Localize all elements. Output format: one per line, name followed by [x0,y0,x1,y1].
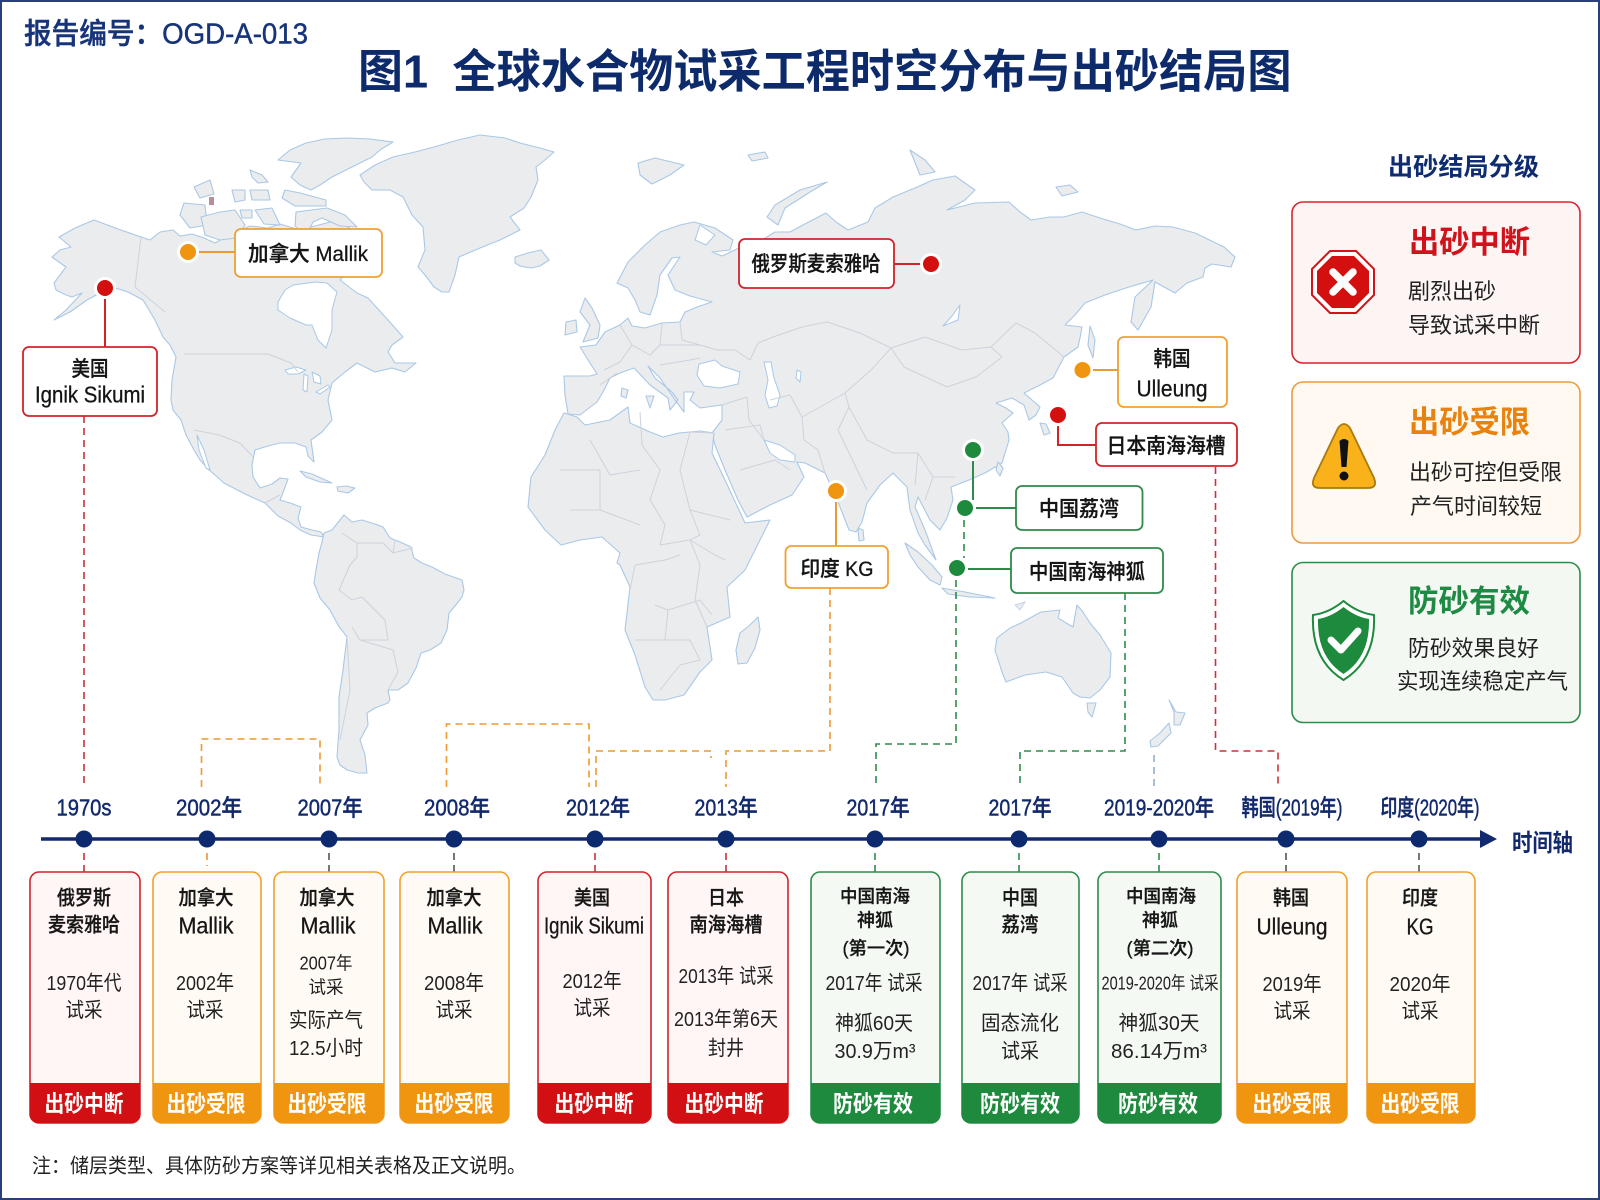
footnote: 注：储层类型、具体防砂方案等详见相关表格及正文说明。 [32,1154,526,1178]
title: 全球水合物试采工程时空分布与出砂结局图 [452,46,1292,98]
legend item: sand control effective: 实现连续稳定产气 [1397,669,1568,694]
map marker: Japan Nankai: 日本南海海槽 [1106,435,1226,458]
card: Russia Messoyakha: 俄罗斯 [57,886,111,910]
card: USA Ignik Sikumi [538,872,651,1123]
year labels: 2013年 [694,794,758,820]
card: China Shenhu first: 2017年 试采 [826,972,922,995]
card: Canada Mallik 2008: 出砂受限 [414,1090,494,1116]
card: Canada Mallik 2007: 2007年 [300,954,352,974]
card: China Shenhu second: 86.14万m³ [1111,1040,1207,1063]
map marker: India KG: 印度 KG [800,558,874,581]
caribbean islands [300,471,355,493]
card: Japan Nankai: 2013年 试采 [678,965,774,988]
map marker: USA Ignik Sikumi [23,277,157,416]
connector: Liwan dot dashed [963,520,965,558]
card: Canada Mallik 2008 [400,872,509,1123]
card: China Shenhu first: 神狐60天 [835,1012,913,1035]
hudson bay and great lakes [278,282,337,348]
north america [52,220,416,537]
card: Japan Nankai [668,872,788,1123]
card: China Liwan: 固态流化 [981,1012,1059,1035]
card: Canada Mallik 2002: Mallik [178,912,234,938]
inland seas [695,225,960,462]
card: India KG: KG [1406,914,1434,940]
card: Korea Ulleung: Ulleung [1256,914,1328,940]
map marker: India KG [786,480,888,588]
card: Korea Ulleung: 出砂受限 [1252,1090,1332,1116]
year labels: 1970s [56,794,112,820]
card: USA Ignik Sikumi: Ignik Sikumi [544,912,644,938]
map marker: China Shenhu: 中国南海神狐 [1029,561,1145,584]
card: China Shenhu first: 30.9万m³ [834,1040,916,1063]
card: China Liwan: 中国 [1002,886,1038,910]
islands of europe and arctic russia [565,150,1095,541]
world map [52,135,1235,773]
legend item: sand limited [1292,382,1580,543]
card: China Liwan [962,872,1079,1123]
card: China Shenhu first: 防砂有效 [833,1090,913,1116]
connector: Ignik Sikumi dashed to 1970s [83,416,85,787]
card: Canada Mallik 2002: 试采 [186,999,224,1022]
connector: 2002 to 2007 dashed [202,739,320,787]
map marker: Korea Ulleung [1072,337,1227,407]
icon: warning triangle [1313,424,1375,488]
card: Japan Nankai: 南海海槽 [690,914,762,936]
card: China Shenhu first [811,872,940,1123]
card: China Shenhu second: (第二次) [1126,938,1194,958]
icon: stop octagon with cross [1312,251,1374,313]
card: USA Ignik Sikumi: 美国 [574,886,610,910]
year labels: 2017年 [988,794,1052,820]
card: India KG [1367,872,1475,1123]
card: India KG: 出砂受限 [1380,1090,1460,1116]
icon: shield with check [1313,601,1374,680]
legend item: sand interruption: 剧烈出砂 [1408,279,1496,304]
card: Canada Mallik 2007: Mallik [300,912,356,938]
madagascar [736,617,760,664]
card: USA Ignik Sikumi: 出砂中断 [554,1090,634,1116]
eurasia [564,176,1235,560]
card: Russia Messoyakha: 麦索雅哈 [48,914,120,936]
card: China Shenhu second [1098,872,1221,1123]
card: Russia Messoyakha [30,872,140,1123]
connector: India KG to 2013 dashed [726,588,830,787]
africa [528,407,770,700]
report number: 报告编号：OGD-A-013 [24,18,308,50]
card: Canada Mallik 2002: 加拿大 [178,886,234,910]
card: Canada Mallik 2002: 2002年 [176,972,234,995]
year labels: 2019-2020年 [1104,794,1214,820]
card: Japan Nankai: 2013年第6天 [674,1008,778,1031]
card: Russia Messoyakha: 出砂中断 [44,1090,124,1116]
card: China Shenhu second: 中国南海 [1126,886,1196,906]
card: Korea Ulleung: 韩国 [1273,886,1309,910]
connector: 2012 to 2013 dashed [596,751,711,787]
connector: Shenhu label to 2017 dashed [1020,593,1125,787]
year labels: 2012年 [566,794,630,820]
card: China Shenhu second: 2019-2020年 试采 [1102,974,1218,994]
year labels: 韩国(2019年) [1242,794,1342,820]
year labels: 2007年 [298,794,362,820]
card: China Shenhu second: 神狐 [1142,910,1178,930]
card: Canada Mallik 2008: 2008年 [424,972,484,995]
baja california [197,435,210,470]
card: Korea Ulleung: 试采 [1274,1000,1310,1023]
year labels: 2002年 [176,794,242,820]
card: USA Ignik Sikumi: 2012年 [562,970,622,993]
card: China Liwan: 2017年 试采 [972,972,1068,995]
axis label: 时间轴 [1512,830,1573,857]
legend item: sand control effective: 防砂有效 [1408,584,1530,619]
card: China Shenhu second: 神狐30天 [1118,1012,1200,1035]
legend heading: 出砂结局分级 [1388,154,1539,182]
timeline axis [41,830,1497,848]
card: Canada Mallik 2002: 出砂受限 [166,1090,246,1116]
map marker: Russia Messoyakha: 俄罗斯麦索雅哈 [752,253,880,276]
card: Canada Mallik 2007: 加拿大 [300,886,354,910]
legend item: sand control effective [1292,562,1580,722]
map marker: Russia Messoyakha [739,239,942,288]
connector: 2008 to 2012 dashed [446,724,589,787]
title: 图1 [358,46,428,98]
card: China Shenhu first: 神狐 [857,910,893,930]
card: China Shenhu first: 中国南海 [840,886,910,906]
timeline stems [84,853,1419,872]
map marker: USA Ignik Sikumi: 美国 [72,358,108,381]
card: Canada Mallik 2007: 12.5小时 [289,1037,363,1060]
card: Korea Ulleung: 2019年 [1262,973,1322,996]
new zealand [1150,700,1185,747]
card: China Shenhu second: 防砂有效 [1118,1090,1198,1116]
card: China Liwan: 荔湾 [1002,912,1038,936]
card: China Liwan: 试采 [1001,1040,1039,1063]
card: India KG: 试采 [1402,1000,1438,1023]
arctic islands [180,138,393,240]
card: Japan Nankai: 封井 [708,1037,744,1060]
card: Canada Mallik 2007: 出砂受限 [288,1090,366,1116]
card: India KG: 2020年 [1390,973,1450,996]
card: Canada Mallik 2007: 试采 [308,978,344,998]
panel: legend [1292,154,1580,722]
card: China Shenhu first: (第一次) [842,938,910,958]
card: Canada Mallik 2008: 试采 [436,999,472,1022]
south america [314,515,464,773]
legend item: sand limited: 产气时间较短 [1410,494,1542,519]
card: China Liwan: 防砂有效 [980,1090,1060,1116]
card: Canada Mallik 2002 [153,872,261,1123]
country borders [135,237,1064,740]
map marker: Canada Mallik [177,229,382,277]
legend item: sand interruption: 导致试采中断 [1408,313,1540,338]
card: India KG: 印度 [1402,886,1438,910]
card: USA Ignik Sikumi: 试采 [574,997,610,1020]
connector: Japan label to Korea column dashed [1216,467,1278,787]
connector: Shenhu dot to 2017 dashed [876,580,956,787]
card: Korea Ulleung [1237,872,1347,1123]
map marker: China Liwan [954,439,1142,530]
legend item: sand interruption [1292,202,1580,363]
card: Canada Mallik 2008: 加拿大 [426,886,482,910]
southeast asia islands [905,543,1025,610]
card: Japan Nankai: 出砂中断 [684,1090,764,1116]
australia [995,605,1111,698]
card: Japan Nankai: 日本 [708,886,744,910]
iceland [515,250,549,268]
legend item: sand limited: 出砂可控但受限 [1409,460,1562,485]
map marker: Korea Ulleung: Ulleung [1136,376,1208,402]
map marker: Japan Nankai [1047,404,1237,466]
legend item: sand limited: 出砂受限 [1409,405,1530,440]
map marker: Korea Ulleung: 韩国 [1154,348,1190,371]
card: Canada Mallik 2007 [274,872,384,1123]
map marker: Canada Mallik: 加拿大 Mallik [248,242,368,266]
year labels: 2017年 [846,794,910,820]
legend item: sand control effective: 防砂效果良好 [1408,636,1539,661]
year labels: 印度(2020年) [1380,794,1480,820]
card: Canada Mallik 2008: Mallik [428,912,483,938]
card: Russia Messoyakha: 试采 [66,999,102,1022]
card: Canada Mallik 2007: 实际产气 [289,1009,363,1032]
greenland [360,135,554,292]
map marker: China Shenhu [946,548,1163,593]
map marker: China Liwan: 中国荔湾 [1039,498,1119,521]
year labels: 2008年 [424,794,490,820]
card: Russia Messoyakha: 1970年代 [46,972,122,995]
map marker: USA Ignik Sikumi: Ignik Sikumi [35,382,145,408]
legend item: sand interruption: 出砂中断 [1409,225,1530,260]
connector: 2019-2020 dashed [1153,755,1155,787]
year labels [56,794,1480,820]
